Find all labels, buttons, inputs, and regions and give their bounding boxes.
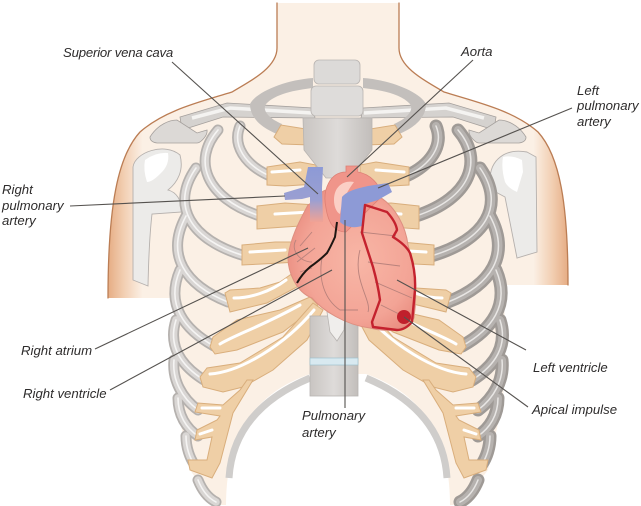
coronary line xyxy=(297,222,337,283)
leader lines xyxy=(70,60,572,408)
left humerus xyxy=(133,149,182,286)
aorta xyxy=(325,166,382,232)
label: right pulmonary artery: pulmonary xyxy=(1,198,65,213)
label: pulmonary artery: Pulmonary xyxy=(302,408,365,423)
right humerus highlight xyxy=(502,156,523,192)
label: left ventricle: Left ventricle xyxy=(533,360,608,375)
heart body xyxy=(288,190,416,330)
apical impulse dot xyxy=(397,310,411,324)
label: pulmonary artery: artery xyxy=(302,425,337,440)
label: right atrium: Right atrium xyxy=(21,343,92,358)
abdominal opening xyxy=(226,374,450,506)
label: left pulmonary artery: Left xyxy=(577,83,599,98)
left ribs xyxy=(174,126,270,502)
pulmonary artery xyxy=(340,183,392,227)
right humerus xyxy=(490,151,537,258)
right ribs xyxy=(406,126,502,502)
label: right ventricle: Right ventricle xyxy=(23,386,107,401)
diaphragm edge xyxy=(229,378,447,478)
label: apical impulse: Apical impulse xyxy=(531,402,617,417)
label: left pulmonary artery: pulmonary xyxy=(576,98,640,113)
xiphoid xyxy=(327,312,345,341)
spine xyxy=(303,60,372,396)
coronary vessels xyxy=(294,232,412,316)
right shoulder girdle and cartilage xyxy=(353,78,526,478)
skin outline xyxy=(108,3,568,298)
heart xyxy=(284,166,416,330)
sternum band xyxy=(310,358,358,365)
aorta highlight xyxy=(334,182,354,214)
left humerus highlight xyxy=(144,153,168,182)
label: aorta: Aorta xyxy=(460,44,493,59)
body silhouette xyxy=(108,3,568,505)
label: right pulmonary artery: artery xyxy=(2,213,37,228)
left shoulder girdle and cartilage xyxy=(150,78,323,478)
label: right pulmonary artery: Right xyxy=(2,182,33,197)
superior vena cava xyxy=(284,167,323,222)
label: superior vena cava: Superior vena cava xyxy=(63,45,173,60)
left ventricle outline xyxy=(362,205,415,330)
label: left pulmonary artery: artery xyxy=(577,114,612,129)
